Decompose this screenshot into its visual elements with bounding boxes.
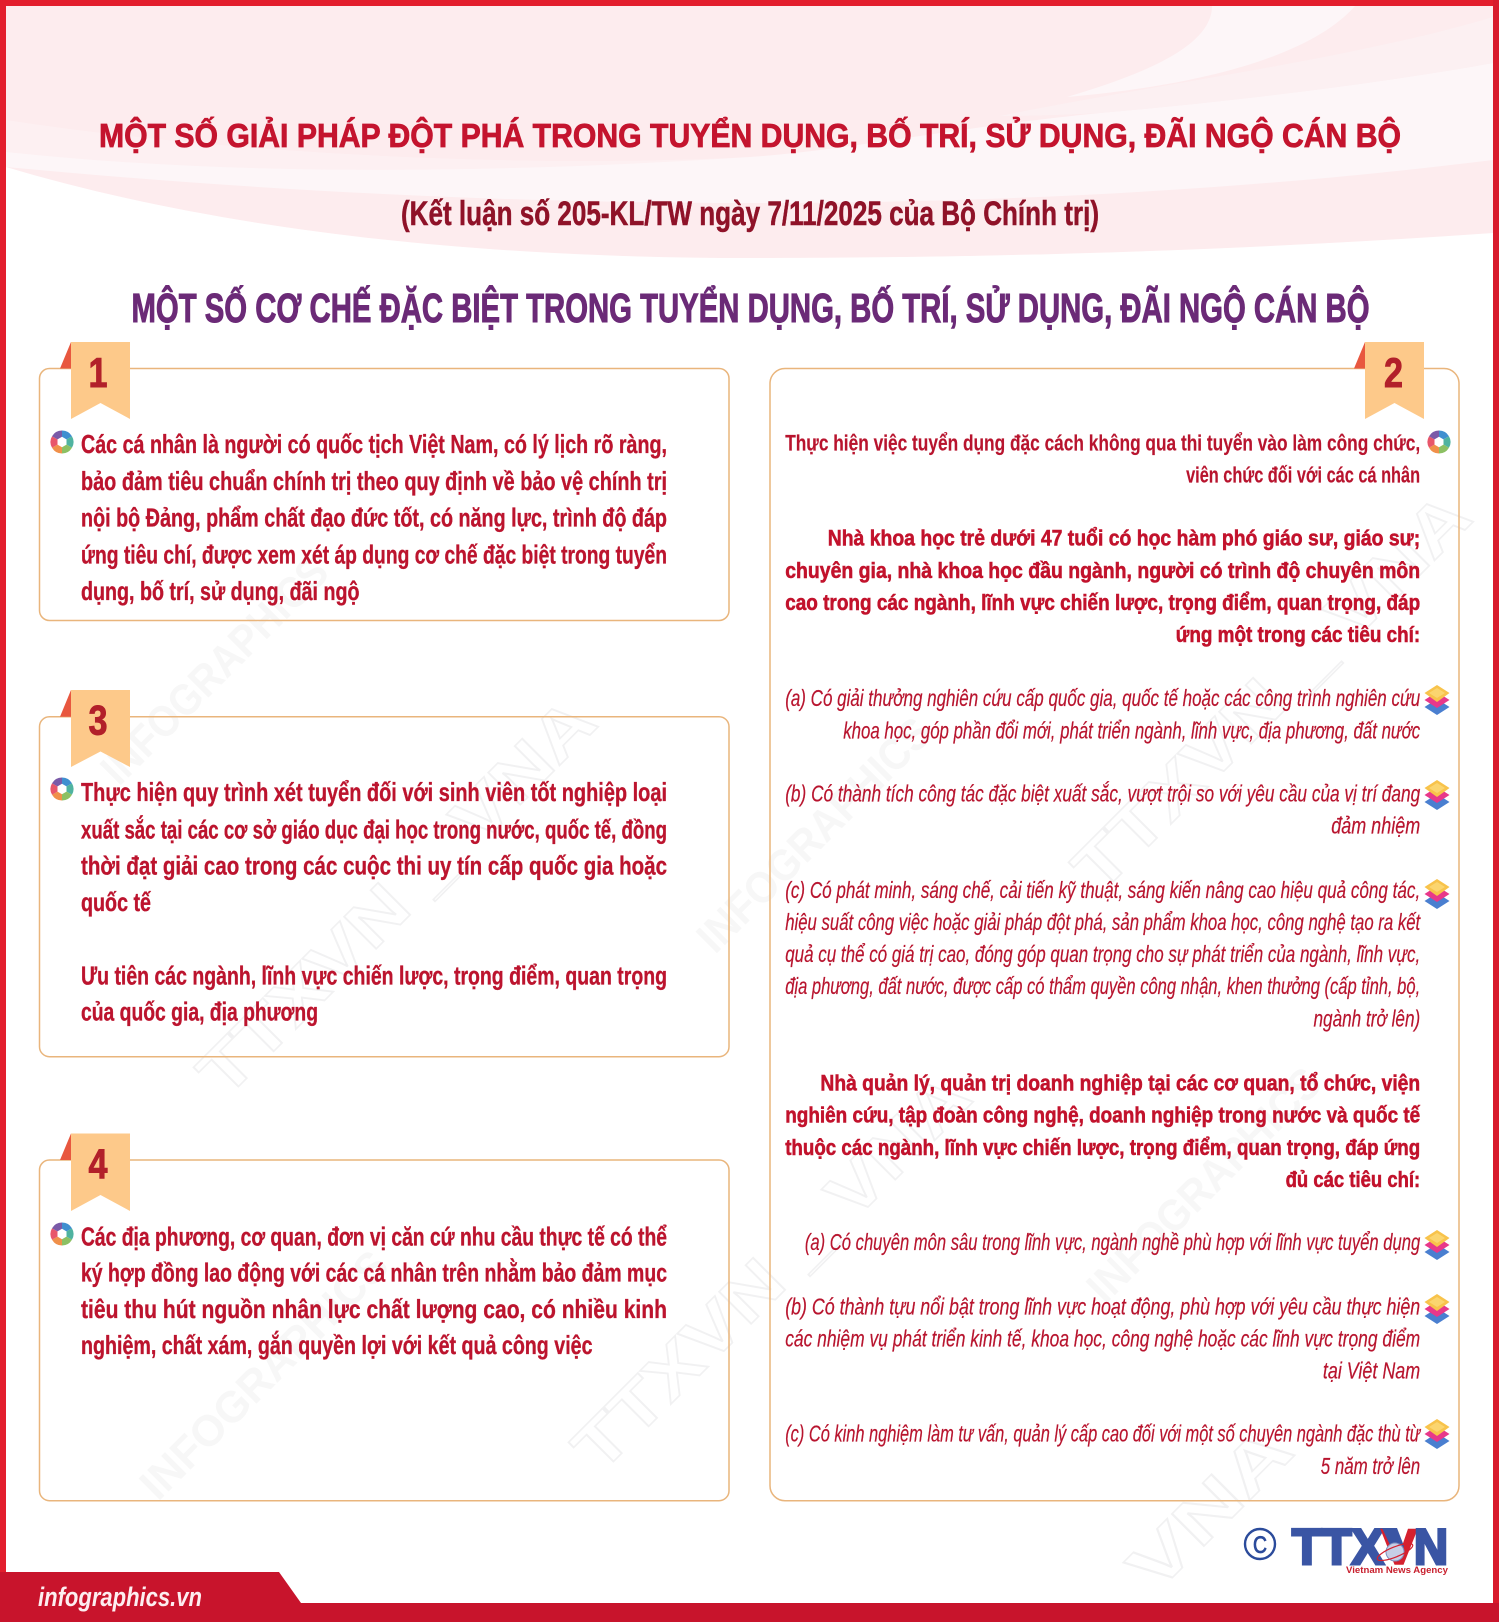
criteria heading: managers: Nhà quản lý, quản trị doanh nghiệp tại các cơ quan, tổ chức, viện xyxy=(820,1071,1420,1096)
card 4 outline xyxy=(40,1160,729,1501)
item b xyxy=(785,780,1420,839)
text block 4: Các địa phương, cơ quan, đơn vị căn cứ nhu cầu thực tế có thể xyxy=(81,1221,667,1251)
logo: TTXVN xyxy=(1245,1519,1449,1576)
icon: layers xyxy=(1424,1419,1450,1449)
criteria heading: scientists: ứng một trong các tiêu chí: xyxy=(1176,622,1420,647)
text block 1: Các cá nhân là người có quốc tịch Việt Nam, có lý lịch rõ ràng, xyxy=(81,429,667,459)
text block 4: nghiệm, chất xám, gắn quyền lợi với kết quả công việc xyxy=(81,1330,592,1360)
wordmark xyxy=(1292,1519,1448,1575)
criteria heading: scientists: Nhà khoa học trẻ dưới 47 tuổi có học hàm phó giáo sư, giáo sư; xyxy=(828,526,1420,551)
background: pink header swoosh xyxy=(6,6,1493,258)
item c xyxy=(785,877,1421,1031)
card 1 outline xyxy=(40,368,729,620)
copyright mark xyxy=(1245,1529,1275,1559)
text block 1: nội bộ Đảng, phẩm chất đạo đức tốt, có năng lực, trình độ đáp xyxy=(81,502,667,532)
text block 4: tiêu thu hút nguồn nhân lực chất lượng cao, có nhiều kinh xyxy=(81,1294,667,1324)
watermarks: INFOGRAPHICS xyxy=(91,547,338,794)
text block 3: thời đạt giải cao trong các cuộc thi uy tín cấp quốc gia hoặc xyxy=(81,850,667,880)
icon: aperture xyxy=(50,778,74,800)
footer site label: infographics.vn xyxy=(38,1582,202,1612)
icon: layers xyxy=(1424,1294,1450,1324)
watermarks: INFOGRAPHICS xyxy=(1077,1058,1331,1312)
panel 4 xyxy=(40,1134,729,1501)
text block 3: Thực hiện quy trình xét tuyển đối với sinh viên tốt nghiệp loại xyxy=(81,777,667,807)
subtitle: (Kết luận số 205-KL/TW ngày 7/11/2025 của Bộ Chính trị) xyxy=(401,195,1099,233)
ribbon 2 xyxy=(1354,342,1424,419)
globe xyxy=(1376,1540,1414,1564)
ribbon 4 xyxy=(60,1134,130,1211)
icon: aperture xyxy=(50,1222,74,1246)
text block 4: ký hợp đồng lao động với các cá nhân trên nhằm bảo đảm mục xyxy=(81,1258,667,1288)
intro text xyxy=(785,430,1420,488)
text block 1: ứng tiêu chí, được xem xét áp dụng cơ chế đặc biệt trong tuyển xyxy=(81,540,667,570)
icon: layers xyxy=(1424,1230,1450,1260)
watermarks: INFOGRAPHICS xyxy=(130,1241,398,1509)
ribbon 4: 4 xyxy=(88,1140,108,1188)
card 2 outline xyxy=(770,368,1459,1501)
text block 1: bảo đảm tiêu chuẩn chính trị theo quy định về bảo vệ chính trị xyxy=(81,466,667,496)
ribbon 2: 2 xyxy=(1384,349,1403,396)
watermarks: TTXVN _ VNA xyxy=(558,1058,985,1485)
ribbon 1: 1 xyxy=(88,349,108,396)
icon: layers xyxy=(1424,879,1450,909)
icon: aperture xyxy=(1427,430,1451,454)
agency tagline: Vietnam News Agency xyxy=(1346,1565,1449,1576)
item b managers: tại Việt Nam xyxy=(1323,1358,1420,1384)
text block 3: quốc tế xyxy=(81,887,151,917)
criteria heading: managers xyxy=(785,1071,1421,1192)
watermarks xyxy=(91,478,1485,1605)
text block 3 xyxy=(81,777,667,1026)
icon: layers xyxy=(1424,685,1450,715)
item c: ngành trở lên) xyxy=(1314,1005,1420,1031)
text block 3: xuất sắc tại các cơ sở giáo dục đại học trong nước, quốc tế, đồng xyxy=(81,814,667,844)
criteria heading: scientists: chuyên gia, nhà khoa học đầu ngành, người có trình độ chuyên môn xyxy=(785,558,1420,583)
text block 3: Ưu tiên các ngành, lĩnh vực chiến lược, trọng điểm, quan trọng xyxy=(81,960,667,990)
watermarks: TTXVN _ VNA xyxy=(1058,478,1485,905)
wordmark: N xyxy=(1414,1519,1448,1575)
text block 3: của quốc gia, địa phương xyxy=(81,996,318,1026)
card 3 outline xyxy=(40,717,729,1057)
watermarks: INFOGRAPHICS xyxy=(687,708,941,962)
criteria heading: scientists xyxy=(785,526,1420,647)
ribbon 1 xyxy=(60,342,130,419)
wordmark: TTX xyxy=(1292,1519,1384,1575)
watermarks: VNA xyxy=(1113,1411,1306,1605)
panel 1 xyxy=(40,342,729,620)
item c managers xyxy=(785,1421,1421,1479)
copyright mark: C xyxy=(1253,1532,1267,1559)
item b: đảm nhiệm xyxy=(1331,813,1420,839)
text block 4 xyxy=(81,1221,667,1360)
criteria heading: managers: đủ các tiêu chí: xyxy=(1286,1167,1420,1192)
footer band xyxy=(0,1572,1499,1622)
text block 1: dụng, bố trí, sử dụng, đãi ngộ xyxy=(81,576,360,606)
text block 1 xyxy=(81,429,667,606)
intro text: viên chức đối với các cá nhân xyxy=(1186,462,1420,488)
panel 2 xyxy=(770,342,1459,1501)
icon: layers xyxy=(1424,780,1450,810)
item c managers: 5 năm trở lên xyxy=(1321,1453,1420,1479)
wordmark: V xyxy=(1381,1519,1418,1575)
panel 3 xyxy=(40,690,729,1057)
ribbon 3 xyxy=(60,690,130,767)
icon: aperture xyxy=(50,430,74,454)
watermarks: TTXVN _ VNA xyxy=(183,683,610,1110)
item b managers xyxy=(785,1293,1420,1384)
ribbon 3: 3 xyxy=(88,696,108,744)
item a xyxy=(785,685,1421,743)
